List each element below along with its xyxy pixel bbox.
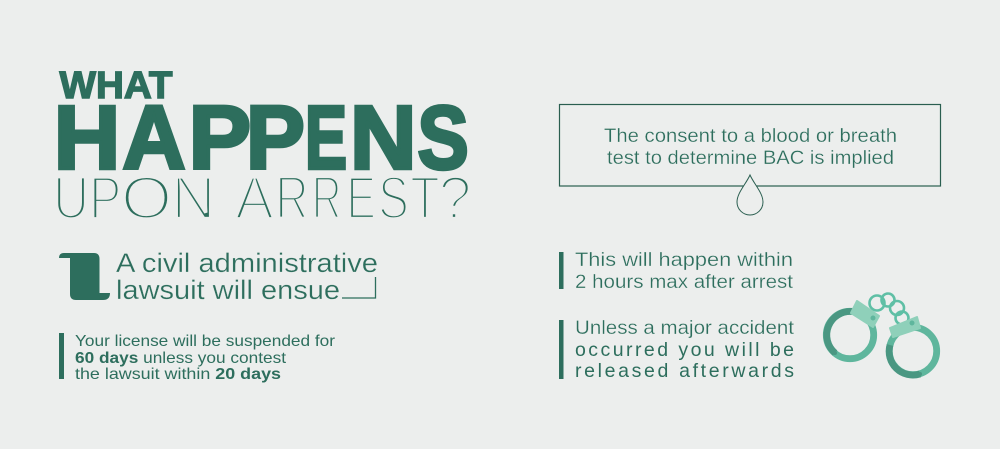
keyholes bbox=[870, 316, 876, 320]
text block: released afterwards bbox=[559, 317, 795, 382]
heading: civil lawsuit bbox=[116, 248, 378, 305]
right cuff bbox=[889, 327, 937, 375]
right cuff lock plate bbox=[890, 317, 920, 337]
title line: UPON ARREST?: R bbox=[275, 164, 309, 232]
text block: license suspension bbox=[59, 333, 336, 383]
title line: HAPPENS: N bbox=[350, 88, 416, 188]
text block: within 2 hours bbox=[559, 249, 794, 293]
accent bar bbox=[559, 252, 564, 289]
text block: license suspension: 60 days unless you contest bbox=[75, 350, 287, 367]
icon: scroll bbox=[59, 253, 110, 300]
title line: UPON ARREST?: S bbox=[378, 164, 409, 232]
title bbox=[53, 65, 471, 232]
text block: within 2 hours: This will happen within bbox=[575, 249, 793, 271]
heading corner bracket bbox=[342, 277, 376, 298]
title line: HAPPENS: A bbox=[122, 88, 186, 188]
text block: released afterwards: occurred you will be bbox=[575, 339, 794, 361]
title line: UPON ARREST?: O bbox=[121, 164, 172, 232]
title line: HAPPENS: S bbox=[418, 88, 469, 188]
accent bar bbox=[559, 320, 564, 379]
title line: WHAT: WHAT bbox=[60, 65, 172, 107]
panel: implied consent box: The consent to a blood or breath bbox=[604, 125, 897, 147]
title line: UPON ARREST?: P bbox=[89, 164, 121, 232]
panel: implied consent box bbox=[560, 104, 940, 186]
icon: blood drop bbox=[737, 175, 763, 215]
text block: released afterwards: released afterwards bbox=[575, 360, 794, 382]
heading: civil lawsuit: A civil administrative bbox=[116, 248, 378, 278]
heading: civil lawsuit: lawsuit will ensue bbox=[116, 275, 340, 305]
title line: HAPPENS bbox=[54, 88, 469, 188]
title line: HAPPENS: P bbox=[246, 88, 305, 188]
left cuff bbox=[826, 311, 874, 359]
title line: UPON ARREST?: R bbox=[312, 164, 342, 232]
title line: HAPPENS: E bbox=[305, 88, 347, 188]
icon: handcuffs bbox=[826, 294, 937, 376]
text block: released afterwards: Unless a major accident bbox=[575, 317, 795, 339]
title line: HAPPENS: H bbox=[54, 88, 120, 188]
text block: license suspension: Your license will be suspended for bbox=[75, 333, 336, 350]
title line: UPON ARREST? bbox=[53, 164, 471, 232]
left cuff lock plate bbox=[851, 301, 879, 327]
title line: UPON ARREST?: T bbox=[410, 164, 440, 232]
accent bar bbox=[59, 333, 64, 379]
title line: UPON ARREST?: A bbox=[235, 164, 274, 232]
chain links bbox=[870, 294, 908, 324]
title line: HAPPENS: P bbox=[189, 88, 251, 188]
title line: UPON ARREST?: E bbox=[346, 164, 376, 232]
text block: within 2 hours: 2 hours max after arrest bbox=[575, 271, 794, 293]
panel: implied consent box: test to determine BAC is implied bbox=[607, 147, 894, 169]
text block: license suspension: the lawsuit within 20 days bbox=[75, 366, 281, 383]
title line: UPON ARREST?: N bbox=[171, 164, 216, 232]
title line: UPON ARREST?: U bbox=[53, 164, 89, 232]
title line: UPON ARREST?: ? bbox=[438, 164, 472, 232]
